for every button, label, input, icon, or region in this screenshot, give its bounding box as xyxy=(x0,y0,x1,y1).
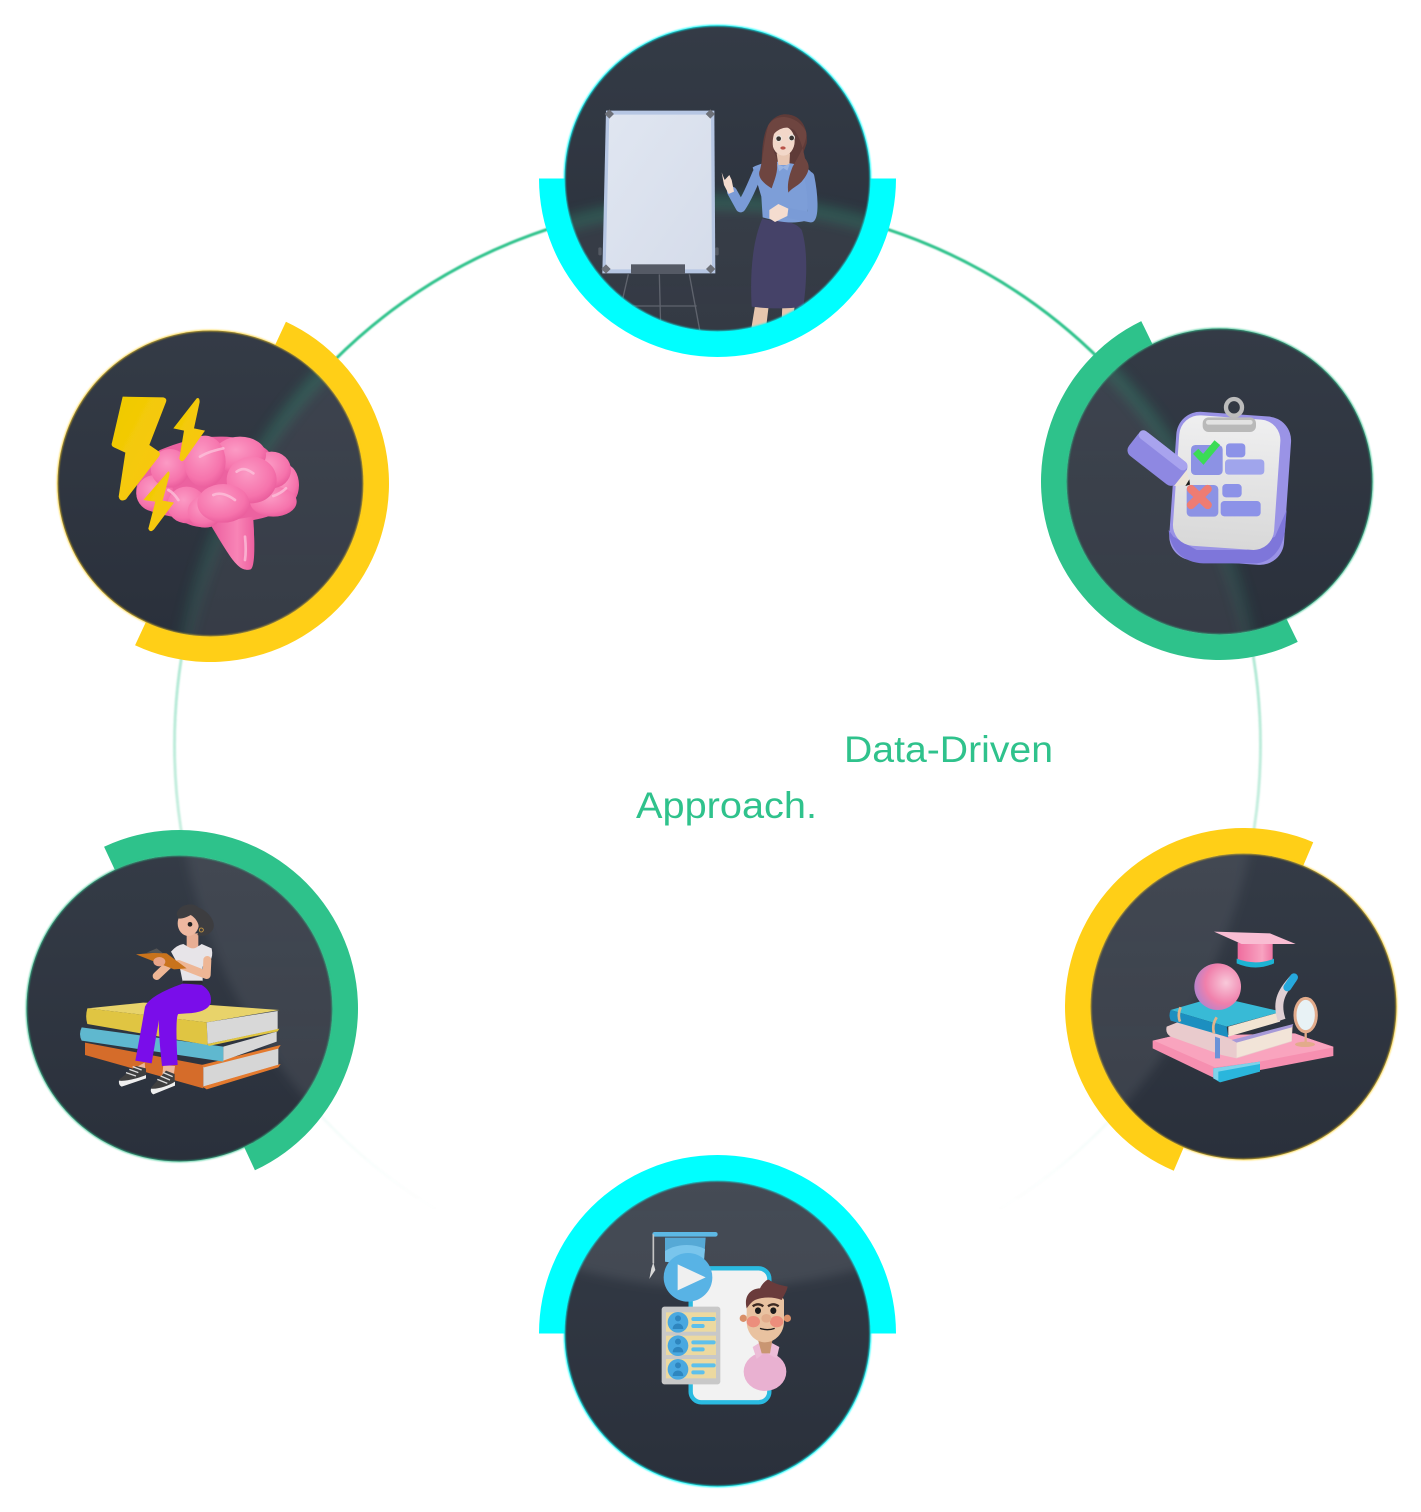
disc background xyxy=(26,856,332,1162)
disc rim xyxy=(564,26,870,332)
panel: clipboard (upper right) xyxy=(1041,321,1374,660)
panel: online learning (bottom) xyxy=(539,1155,896,1488)
icon: graduation cap, books, ball and mirror xyxy=(1153,932,1333,1082)
accent arc: cyan xyxy=(539,178,896,357)
accent arc: yellow xyxy=(1009,772,1313,1171)
icon: woman reading on stack of books xyxy=(80,905,281,1094)
icon: clipboard checklist xyxy=(1125,399,1293,567)
center heading xyxy=(636,729,1053,826)
disc rim xyxy=(1090,854,1396,1160)
disc rim xyxy=(58,330,364,636)
accent arc: green xyxy=(981,321,1298,720)
icon: teacher at whiteboard xyxy=(598,109,813,332)
panel: reading on books (lower left) xyxy=(24,830,358,1170)
panel: brain (upper left) xyxy=(56,322,389,662)
disc background xyxy=(564,1180,870,1486)
icon: video course with instructor xyxy=(649,1232,791,1402)
disc background xyxy=(564,26,870,332)
disc rim xyxy=(1066,328,1372,634)
panel: study stack (lower right) xyxy=(1065,828,1398,1171)
connecting ring xyxy=(174,202,1260,1288)
accent arc: yellow xyxy=(135,322,448,721)
disc background xyxy=(1066,328,1372,634)
icon: brain with lightning xyxy=(112,397,299,570)
center heading: Data-Driven xyxy=(844,729,1053,770)
panel: presentation (top) xyxy=(539,24,896,357)
accent arc: cyan xyxy=(539,1155,896,1334)
disc rim xyxy=(564,1180,870,1486)
center heading: Approach. xyxy=(636,785,817,826)
disc rim xyxy=(26,856,332,1162)
disc background xyxy=(1090,854,1396,1160)
accent arc: green xyxy=(104,771,417,1170)
disc background xyxy=(58,330,364,636)
